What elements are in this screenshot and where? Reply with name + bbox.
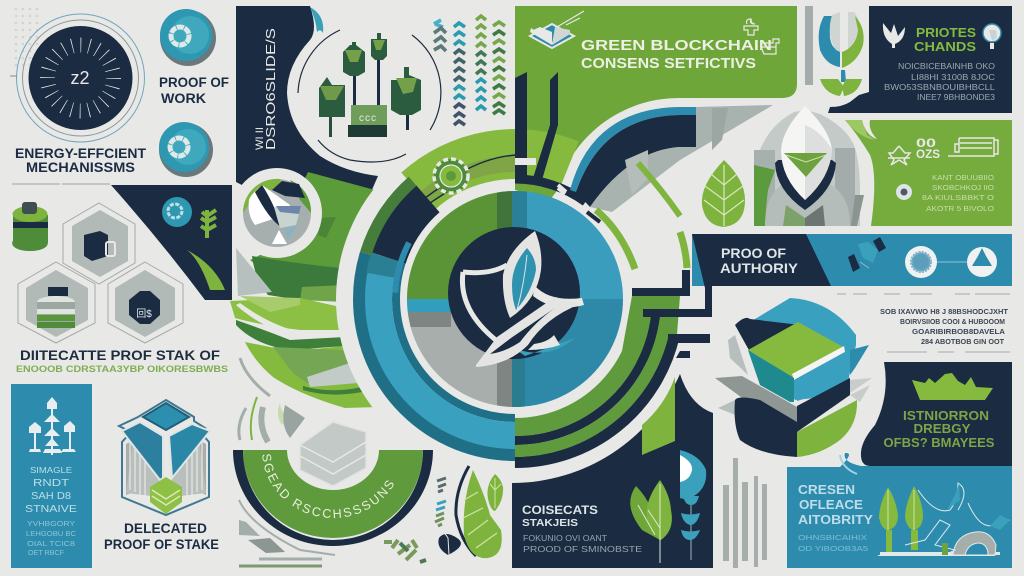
text block: proof of stake small: FOKUNIO OVI OANT bbox=[523, 534, 607, 543]
number: stat bbox=[916, 136, 940, 161]
text block: proof of stake small: PROOD OF SMINOBSTE bbox=[523, 544, 642, 554]
text block: teal card small: OD YIBOOB3A5 bbox=[798, 544, 868, 553]
heading: proof of authority bbox=[720, 245, 799, 276]
decoration: white ring around main circle bbox=[336, 120, 694, 478]
text block: consensus stakes: STAKJEIS bbox=[522, 518, 578, 529]
icon: layered box bbox=[530, 11, 584, 48]
icon: drop in ring bbox=[983, 24, 1001, 49]
heading: energy efficient: MECHANISSMS bbox=[26, 159, 135, 175]
label: arch curved text bbox=[262, 450, 404, 518]
icon: coin with leaf on dark bbox=[162, 197, 225, 290]
icon: green tab bbox=[642, 377, 675, 455]
text block: teal card small: OHNSBICAIHIX bbox=[798, 533, 867, 542]
text block: card body bbox=[884, 62, 996, 102]
text block: card body: BWO53SBNBOUIBHBCLL bbox=[884, 83, 996, 92]
chart: green swirl bbox=[230, 172, 378, 408]
text block: right small paragraph bbox=[837, 294, 1010, 352]
panel: proof of authority banner bbox=[692, 234, 1012, 288]
chart: outer ring right half bbox=[319, 103, 712, 495]
icon: satellite device bbox=[848, 237, 886, 272]
panel: title banner green bbox=[515, 6, 797, 200]
chart: outer ring left half bbox=[320, 104, 710, 494]
icon: person outline bbox=[888, 146, 910, 165]
icon: green mountains bbox=[912, 373, 993, 400]
number: stat: 00 bbox=[916, 136, 936, 150]
text block: proof of stake small bbox=[523, 534, 642, 554]
panel: hexagon lower right: 回$ bbox=[136, 308, 152, 320]
text block: card body: LEHGOBU BC bbox=[26, 531, 76, 538]
text block: right small paragraph: BOIRVSIIOB COOI & HUBOOOM bbox=[900, 317, 1005, 326]
icon: leaf bbox=[702, 160, 745, 227]
decoration: thin green arcs bbox=[638, 163, 680, 216]
text block: green card body: SKOBCHKOJ IIO bbox=[932, 183, 994, 192]
chart: lower green arch: SGEAD RSCCHSSSUNS bbox=[262, 454, 394, 518]
side label: vertical text: WI II bbox=[254, 127, 266, 150]
text block: card body: NOICBICEBAINHB OKO bbox=[898, 62, 995, 71]
text block: card body: LI88HI 3100B 8JOC bbox=[911, 73, 995, 82]
panel: dark right card lower bbox=[861, 362, 1012, 466]
heading: proof of authority: AUTHORIY bbox=[720, 260, 799, 276]
panel: teal card bbox=[11, 384, 92, 568]
heading: dark card text: DREBGY bbox=[914, 421, 971, 436]
icon: dark connector strips bbox=[515, 72, 558, 180]
text block: green card body: 8A KIULSBBKT O bbox=[922, 193, 994, 202]
text block: card heading: RNDT bbox=[33, 478, 69, 489]
text block: card body: OIAL TCIC8 bbox=[27, 541, 75, 548]
heading: proof of work bbox=[159, 75, 229, 106]
panel: hexagon lower right bbox=[108, 262, 183, 343]
panel: green right card bbox=[845, 120, 1012, 226]
decoration: dark connector bars bbox=[632, 270, 712, 358]
heading: title: GREEN BLOCKCHAIN bbox=[581, 38, 772, 54]
text block: right small paragraph: GOARIBIRBOB8DAVELA bbox=[912, 327, 1006, 336]
text block: card body: OET RBCF bbox=[28, 550, 64, 557]
icon: coin two bbox=[159, 122, 213, 177]
icon: teal crescent bbox=[310, 7, 323, 33]
icon: node tree bbox=[29, 397, 76, 455]
chart: chevron columns bbox=[434, 16, 505, 125]
text block: green card body bbox=[922, 173, 994, 213]
heading: dark card text: OFBS? BMAYEES bbox=[884, 435, 995, 450]
chart: lower green arch bbox=[233, 450, 433, 546]
panel: teal card lower right bbox=[787, 453, 1012, 568]
chart: arch band upper right bbox=[570, 105, 773, 269]
number: clock value: z2 bbox=[70, 68, 90, 88]
icon: tree 4 bbox=[391, 67, 421, 130]
heading: teal card text: OFLEACE bbox=[799, 498, 863, 512]
icon: trees in circle bbox=[298, 30, 441, 162]
heading: energy efficient bbox=[15, 145, 146, 175]
chart: central disc quadrants bbox=[407, 190, 625, 410]
icon: green leaf pair bbox=[630, 480, 672, 563]
panel: dark top right card bbox=[828, 6, 1012, 113]
text block: card heading: SAH D8 bbox=[31, 491, 71, 502]
heading: proof of work: PROOF OF bbox=[159, 75, 229, 90]
icon: tree 2 bbox=[343, 42, 365, 115]
heading: delegated proof of stake: DELECATED bbox=[124, 520, 207, 536]
icon: trees and landscape bbox=[878, 483, 1010, 556]
icon: isometric cube bbox=[119, 400, 210, 515]
panel: title banner green: CONSENS SETFICTIVS bbox=[581, 56, 756, 72]
heading: dark card text bbox=[884, 408, 995, 450]
number: stat: OZS bbox=[916, 147, 940, 161]
icon: white circle cluster bbox=[905, 246, 997, 278]
text block: green card body: AKOTR 5 BIVOLO bbox=[926, 204, 994, 213]
icon: lotus bbox=[883, 23, 905, 48]
panel: right lower dark bbox=[512, 374, 713, 568]
text block: right small paragraph: 284 ABOTBOB GIN OOT bbox=[921, 337, 1004, 346]
text block: consensus stakes bbox=[522, 505, 598, 529]
icon: green cylinder bbox=[12, 202, 48, 251]
icon: grey stacked box bbox=[300, 422, 366, 486]
icon: gear on ring bbox=[425, 155, 518, 203]
text block: card heading: STNAIVE bbox=[25, 504, 77, 515]
decoration: grey arc fragments bbox=[239, 358, 335, 566]
panel: consensus stakes text bbox=[522, 377, 675, 563]
chart: grey bars bbox=[723, 458, 767, 568]
heading: teal card text: AITOBRITY bbox=[798, 513, 874, 527]
icon: tree 3 bbox=[371, 33, 387, 108]
text block: green card body: KANT OBUUBIIO bbox=[932, 173, 994, 182]
icon: leaves and sprouts bottom bbox=[384, 466, 503, 562]
text block: card body: INEE7 9BHBONDE3 bbox=[917, 93, 996, 102]
chart: top band of outer ring bbox=[310, 72, 720, 504]
heading: energy efficient: ENERGY-EFFCIENT bbox=[15, 145, 146, 161]
icon: teal drop plant bbox=[680, 450, 706, 560]
panel: hexagon lower left bbox=[18, 262, 95, 343]
side label: vertical text bbox=[254, 28, 278, 150]
icon: tree 1 bbox=[319, 77, 345, 137]
panel: hexagon top bbox=[63, 203, 135, 284]
heading: delegated proof of stake: PROOF OF STAKE bbox=[104, 536, 219, 552]
heading: card title bbox=[914, 25, 976, 54]
heading: teal card text bbox=[798, 483, 874, 527]
icon: small node bbox=[896, 184, 912, 200]
panel: left dark column and triangle bbox=[111, 6, 378, 300]
callout: clock energy mechanism bbox=[10, 14, 144, 142]
text block: consensus stakes: COISECATS bbox=[522, 505, 598, 517]
text block: right small paragraph: SOB IXAVWO H8 J 88BSHODCJXHT bbox=[880, 307, 1008, 316]
heading: proof of work: WORK bbox=[161, 91, 206, 106]
heading: delegated proof of stake bbox=[104, 520, 219, 552]
icon: battery outline bbox=[948, 138, 998, 156]
text block: card heading bbox=[25, 465, 77, 515]
text block: card body: YVHBGORY bbox=[27, 521, 75, 528]
heading: proof of authority: PROO OF bbox=[721, 245, 786, 261]
heading: teal card text: CRESEN bbox=[798, 483, 855, 497]
heading: card title: PRIOTES bbox=[916, 25, 976, 40]
icon: base block: ccc bbox=[359, 113, 377, 124]
panel: sprout icon bbox=[805, 6, 864, 96]
icon: shield with leaf emblem bbox=[448, 227, 584, 367]
icon: onion shield bbox=[750, 100, 871, 228]
heading: card title: CHANDS bbox=[914, 39, 976, 54]
heading: delegate proof: DIITECATTE PROF STAK OF bbox=[20, 348, 220, 363]
icon: pie badge bbox=[232, 168, 322, 258]
heading: dark card text: ISTNIORRON bbox=[903, 408, 989, 423]
icon: small outline figures bbox=[744, 19, 779, 54]
icon: coin one bbox=[160, 9, 216, 66]
text block: card body bbox=[26, 521, 76, 557]
icon: isometric box bbox=[715, 298, 872, 457]
text block: teal card small bbox=[798, 533, 868, 553]
text block: green subtitle: ENOOOB CDRSTAA3YBP OIKORESBWBS bbox=[16, 364, 228, 374]
side label: vertical text: DSRO6SLIDE/S bbox=[263, 28, 278, 150]
text block: card heading: SIMAGLE bbox=[30, 465, 72, 475]
icon: base block bbox=[348, 105, 387, 137]
